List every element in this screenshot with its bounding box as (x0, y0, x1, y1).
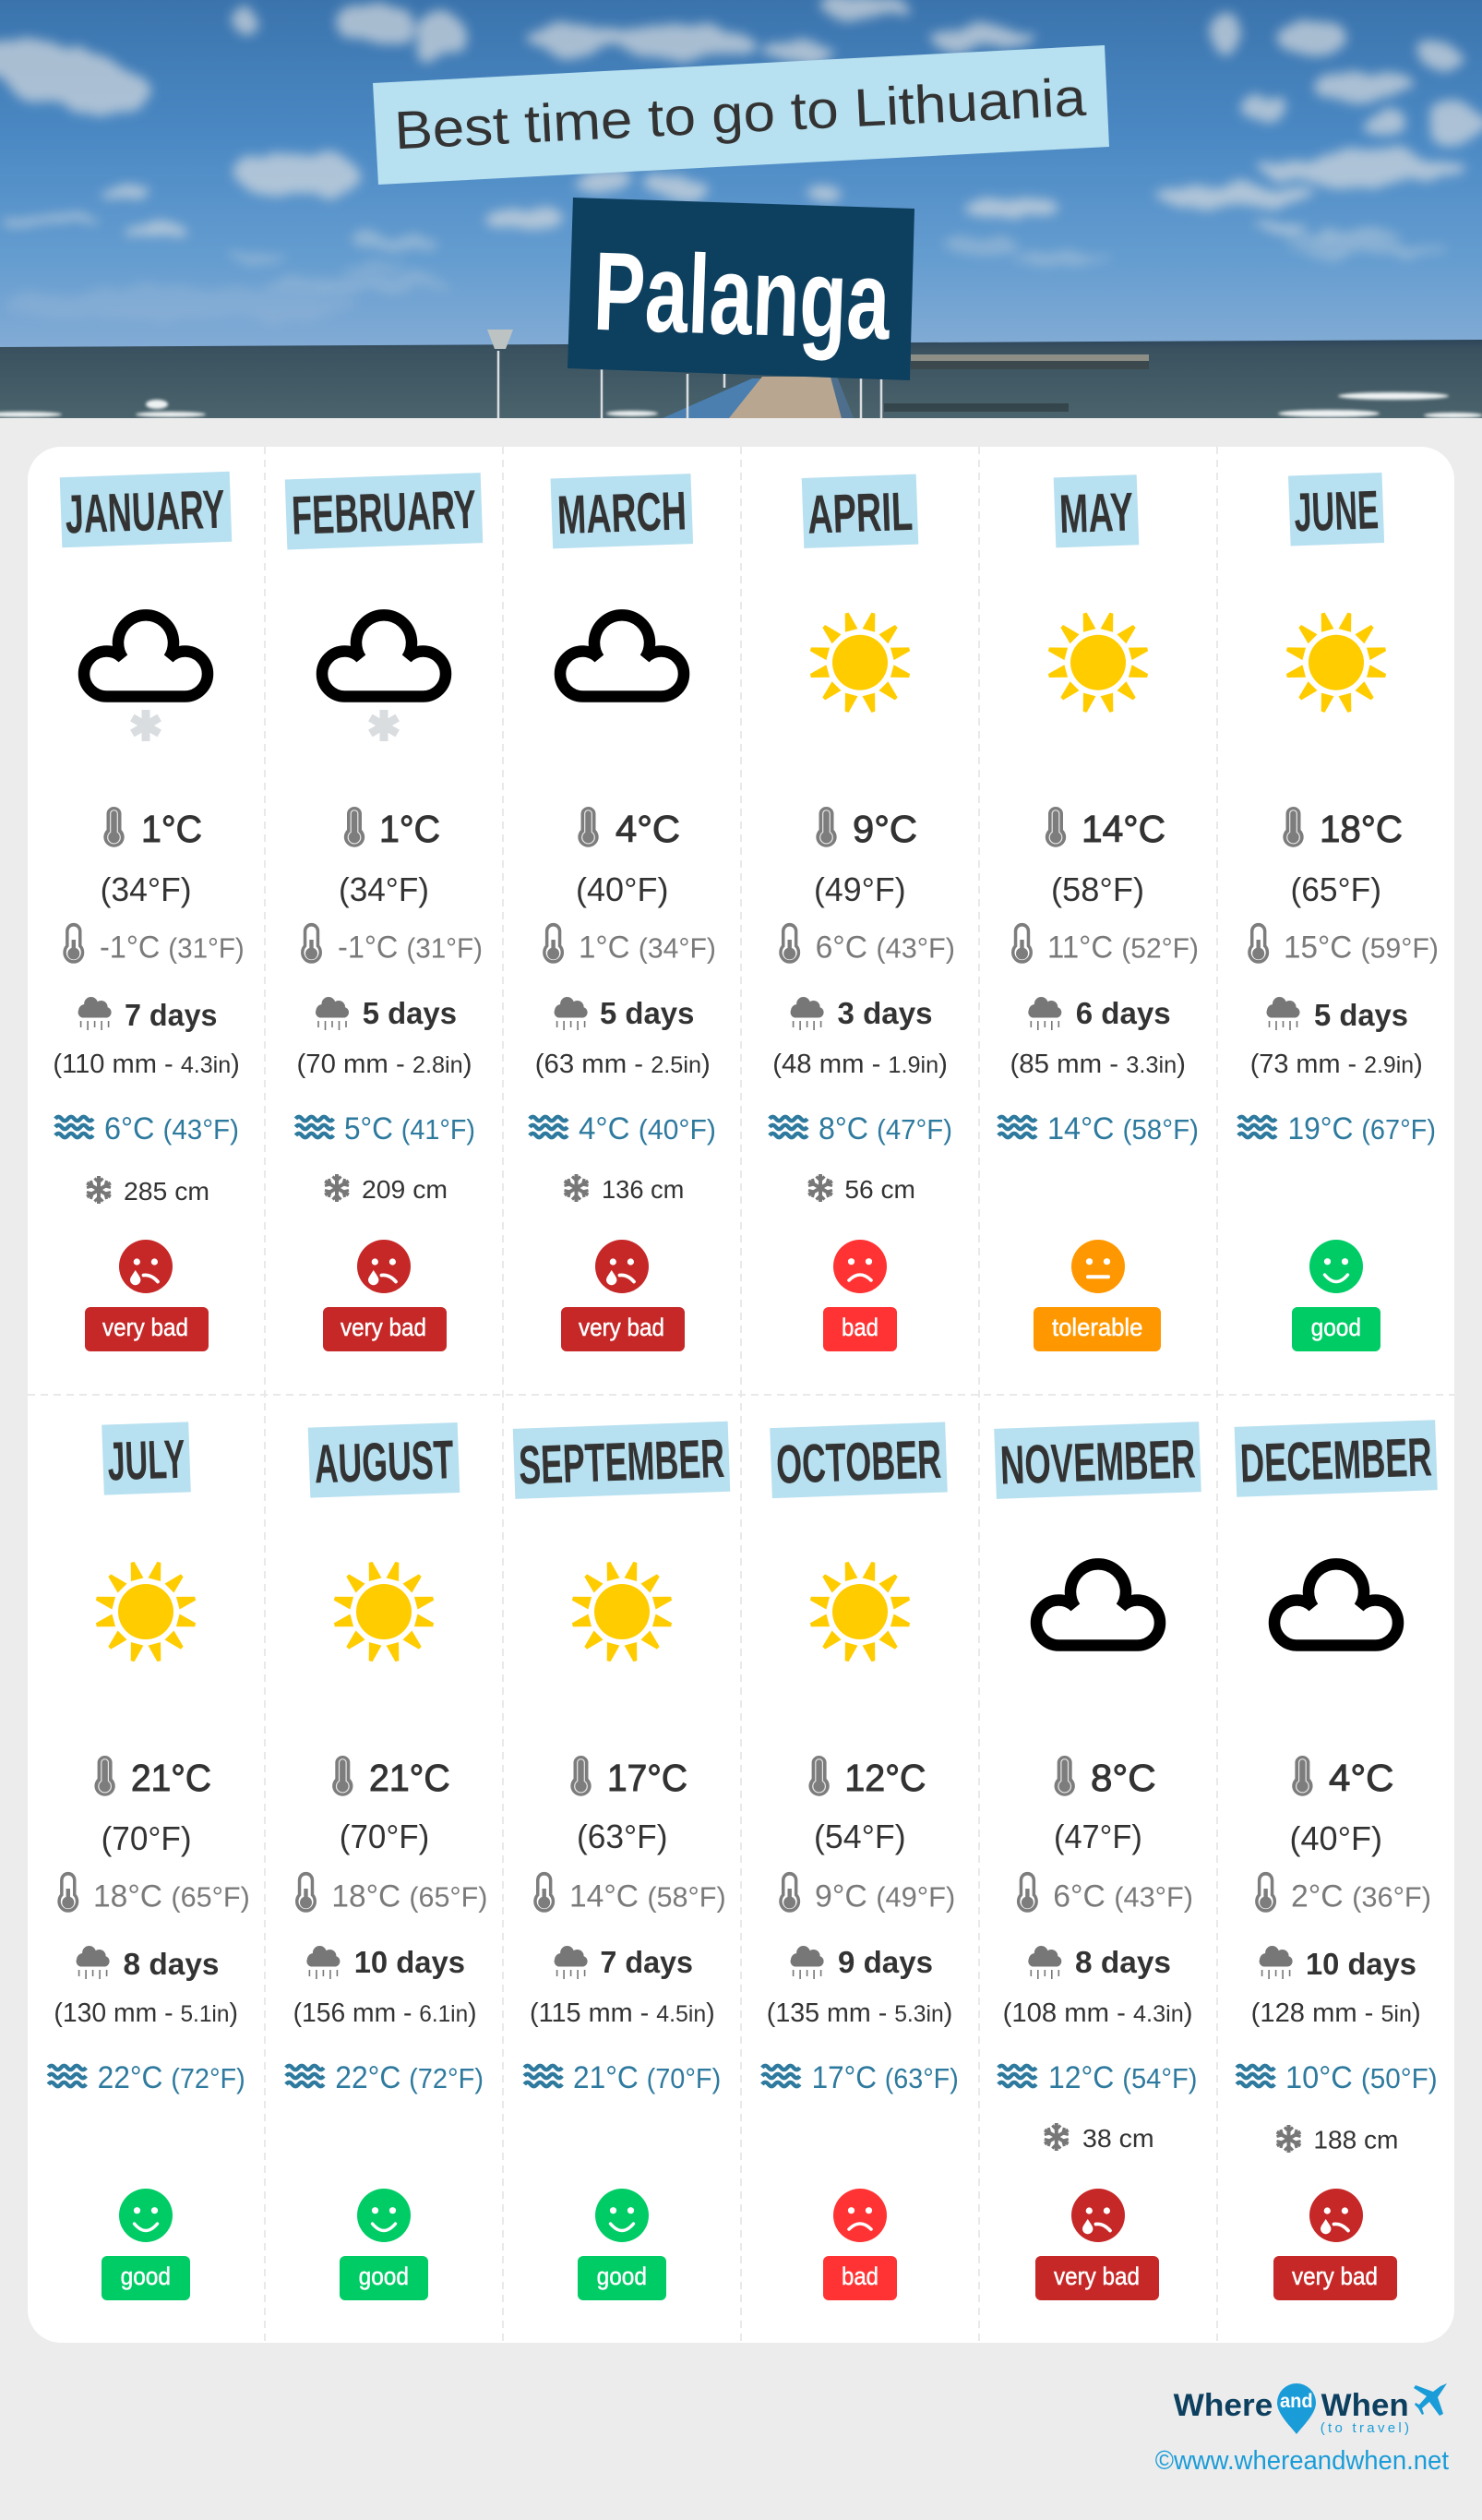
rating badge: good (121, 2262, 171, 2290)
rainy days: 5 days (363, 996, 457, 1030)
month heading: OCTOBER (775, 1429, 942, 1495)
rating face (1071, 1240, 1125, 1293)
logo: Where and When: and (1280, 2391, 1313, 2412)
icon: thermometer low (1257, 1874, 1274, 1911)
panel: July (48, 1422, 250, 2300)
average low: 15°C (59°F) (1284, 930, 1439, 966)
average low: 11°C (52°F) (1047, 930, 1199, 966)
rainy days: 9 days (838, 1945, 933, 1979)
average high celsius: 4°C (1329, 1757, 1393, 1799)
average high fahrenheit: (40°F) (576, 870, 668, 908)
average low: -1°C (31°F) (338, 930, 483, 966)
icon: thermometer low (1013, 925, 1031, 962)
panel: December (1235, 1420, 1438, 2300)
average high fahrenheit: (58°F) (1051, 870, 1144, 908)
sea temperature: 6°C (43°F) (104, 1111, 239, 1146)
month heading (308, 1422, 460, 1498)
month heading: JANUARY (64, 479, 226, 546)
average low: 18°C (65°F) (93, 1879, 250, 1914)
average high celsius: 1°C (141, 808, 202, 850)
precipitation: (85 mm - 3.3in) (1010, 1050, 1186, 1079)
icon: thermometer high (816, 807, 837, 847)
icon: sea waves (295, 1117, 333, 1137)
rating face (357, 2189, 411, 2242)
month heading (513, 1422, 730, 1499)
sea temperature: 22°C (72°F) (335, 2060, 484, 2095)
icon: sun (1285, 611, 1387, 714)
snow depth: 136 cm (602, 1175, 684, 1204)
icon: thermometer high (1292, 1756, 1313, 1796)
icon: thermometer high (808, 1756, 830, 1796)
sea temperature: 10°C (50°F) (1285, 2060, 1438, 2095)
average low: 2°C (36°F) (1291, 1879, 1431, 1914)
icon: thermometer high (570, 1756, 592, 1796)
icon: thermometer high (1046, 807, 1066, 847)
precipitation: (156 mm - 6.1in) (293, 1998, 477, 2028)
month heading (1288, 473, 1384, 546)
average high fahrenheit: (70°F) (340, 1818, 429, 1855)
rating badge (102, 2256, 190, 2300)
icon: snowflake (565, 1174, 589, 1202)
rating badge (340, 2256, 428, 2300)
rating face (1071, 2189, 1125, 2242)
icon: thermometer high (103, 807, 125, 847)
rating face (833, 2189, 887, 2242)
icon: thermometer high (332, 1756, 353, 1796)
rating badge: very bad (341, 1314, 426, 1341)
average low: 6°C (43°F) (1053, 1879, 1193, 1914)
rating face (595, 2189, 649, 2242)
icon: cloud (560, 615, 684, 696)
average high celsius: 21°C (369, 1757, 450, 1799)
rating badge (1035, 2256, 1159, 2300)
rating face (1309, 2189, 1363, 2242)
average high celsius: 1°C (379, 808, 440, 850)
icon: sea waves (55, 1117, 93, 1137)
icon: rain cloud (1028, 1946, 1061, 1979)
month heading (1054, 474, 1139, 547)
month heading: JUNE (1293, 479, 1380, 543)
rating badge (823, 2256, 897, 2300)
icon: rain cloud (78, 997, 112, 1030)
icon: sun (1047, 611, 1149, 714)
rating badge: very bad (579, 1314, 664, 1341)
rainy days: 7 days (125, 998, 218, 1032)
icon: snowflake (808, 1174, 832, 1202)
month heading: JULY (106, 1429, 186, 1492)
icon: rain cloud (791, 997, 824, 1030)
snow depth: 188 cm (1313, 2126, 1398, 2154)
icon: rain cloud (1028, 997, 1061, 1030)
title banner: Best time to go to Lithuania (393, 67, 1088, 161)
icon: sea waves (530, 1117, 568, 1137)
snow depth: 56 cm (844, 1175, 915, 1204)
average high celsius: 12°C (844, 1757, 926, 1799)
snow depth: 285 cm (124, 1177, 209, 1206)
panel: October (762, 1422, 959, 2300)
rating badge: very bad (1054, 2262, 1140, 2290)
icon: thermometer high (578, 807, 599, 847)
average high celsius: 17°C (607, 1757, 687, 1799)
precipitation: (128 mm - 5in) (1251, 1998, 1421, 2028)
month heading: FEBRUARY (291, 479, 477, 546)
average low: 1°C (34°F) (579, 930, 716, 966)
average low: 6°C (43°F) (816, 930, 955, 966)
rating badge (1034, 1307, 1161, 1351)
icon: rain cloud (1260, 1946, 1293, 1979)
header photo: Palanga pier and sky (0, 0, 1482, 418)
average high fahrenheit: (34°F) (339, 870, 429, 908)
icon: rain cloud (77, 1946, 110, 1979)
sea temperature: 19°C (67°F) (1288, 1111, 1436, 1146)
rating badge: very bad (102, 1314, 188, 1341)
icon: sea waves (998, 2066, 1036, 2086)
rainy days: 7 days (600, 1945, 693, 1979)
icon: snowflake (87, 1176, 111, 1204)
rainy days: 6 days (1076, 996, 1171, 1030)
icon: sea waves (1237, 2066, 1274, 2086)
month heading: NOVEMBER (999, 1428, 1196, 1496)
rating badge: good (597, 2262, 647, 2290)
icon: sea waves (762, 2066, 800, 2086)
icon: sun (333, 1561, 435, 1662)
icon: thermometer high (1283, 807, 1304, 847)
average low: 14°C (58°F) (569, 1879, 726, 1914)
icon: rain cloud (791, 1946, 824, 1979)
icon: thermometer low (535, 1874, 553, 1911)
rainy days: 8 days (1075, 1945, 1171, 1979)
rating face (595, 1240, 649, 1293)
sea temperature: 14°C (58°F) (1047, 1111, 1199, 1146)
icon: thermometer low (59, 1874, 78, 1911)
rating face (1309, 1240, 1363, 1293)
rating badge (578, 2256, 666, 2300)
month heading: MARCH (556, 480, 687, 546)
icon: sun (809, 611, 911, 714)
rating badge: good (359, 2262, 409, 2290)
sea temperature: 17°C (63°F) (812, 2060, 959, 2095)
precipitation: (110 mm - 4.3in) (53, 1050, 240, 1079)
average high fahrenheit: (65°F) (1290, 870, 1381, 908)
icon: rain cloud (306, 1946, 340, 1979)
rainy days: 10 days (1306, 1947, 1416, 1981)
rating badge (323, 1307, 447, 1351)
snow depth: 38 cm (1082, 2124, 1154, 2153)
icon: thermometer low (544, 925, 562, 962)
icon: rain cloud (1266, 997, 1299, 1030)
month heading (994, 1422, 1201, 1499)
rating face (119, 1240, 173, 1293)
precipitation: (73 mm - 2.9in) (1250, 1050, 1423, 1079)
panel: November (994, 1422, 1201, 2300)
icon: thermometer low (65, 925, 83, 962)
sea temperature: 21°C (70°F) (573, 2060, 721, 2095)
month heading (770, 1422, 948, 1498)
average high celsius: 18°C (1320, 808, 1403, 850)
icon: sea waves (524, 2066, 562, 2086)
average high fahrenheit: (47°F) (1054, 1818, 1142, 1855)
panel: June (1238, 473, 1439, 1351)
icon: cloud with snow (322, 615, 446, 741)
panel: May (998, 474, 1199, 1351)
logo: Where and When: When (1321, 2388, 1409, 2423)
average high celsius: 9°C (853, 808, 917, 850)
rating face (357, 1240, 411, 1293)
icon: sea waves (998, 1117, 1036, 1137)
average high fahrenheit: (34°F) (101, 870, 192, 908)
icon: cloud (1274, 1564, 1398, 1645)
rainy days: 5 days (1314, 998, 1408, 1032)
rating badge: good (1311, 1314, 1361, 1341)
logo: Where and When (1174, 2383, 1447, 2436)
panel: March (530, 474, 716, 1351)
rating badge (823, 1307, 897, 1351)
rating badge: bad (842, 2262, 878, 2290)
rainy days: 5 days (600, 996, 694, 1030)
rating badge (1273, 2256, 1397, 2300)
rating badge: tolerable (1052, 1314, 1142, 1341)
month heading (802, 474, 918, 548)
panel: April (770, 474, 955, 1351)
panel: January (53, 472, 245, 1351)
icon: rain cloud (555, 1946, 588, 1979)
icon: sun (571, 1561, 673, 1662)
sea temperature: 8°C (47°F) (819, 1111, 952, 1146)
average low: -1°C (31°F) (100, 930, 245, 966)
icon: sea waves (48, 2066, 86, 2086)
precipitation: (70 mm - 2.8in) (297, 1050, 472, 1079)
icon: cloud with snow (84, 615, 208, 741)
icon: rain cloud (555, 997, 588, 1030)
rating face (833, 1240, 887, 1293)
icon: thermometer low (297, 1874, 315, 1911)
month heading: APRIL (807, 481, 914, 546)
rainy days: 3 days (838, 996, 932, 1030)
rating face (119, 2189, 173, 2242)
panel: August (286, 1422, 487, 2300)
rainy days: 8 days (124, 1947, 220, 1981)
precipitation: (48 mm - 1.9in) (772, 1050, 948, 1079)
average low: 9°C (49°F) (815, 1879, 955, 1914)
average high fahrenheit: (70°F) (102, 1819, 192, 1857)
rainy days: 10 days (354, 1945, 465, 1979)
icon: sun (95, 1561, 197, 1662)
precipitation: (115 mm - 4.5in) (530, 1998, 715, 2028)
sea temperature: 12°C (54°F) (1048, 2060, 1198, 2095)
logo: Where and When: (to travel) (1321, 2420, 1409, 2436)
rating badge (1292, 1307, 1380, 1351)
icon: snowflake (1277, 2125, 1301, 2153)
icon: sun (809, 1561, 911, 1662)
icon: thermometer low (303, 925, 320, 962)
month heading (102, 1422, 191, 1495)
icon: thermometer low (781, 925, 798, 962)
city banner: Palanga (592, 228, 893, 363)
month heading (285, 473, 483, 549)
icon: thermometer low (1019, 1874, 1036, 1911)
month heading (60, 472, 232, 547)
panel: September (513, 1422, 730, 2300)
icon: cloud (1036, 1564, 1160, 1645)
precipitation: (130 mm - 5.1in) (54, 1998, 238, 2028)
average high celsius: 21°C (131, 1757, 211, 1799)
average high celsius: 4°C (616, 808, 680, 850)
rating badge: very bad (1292, 2262, 1378, 2290)
city banner (568, 198, 914, 380)
copyright url: ©www.whereandwhen.net (1155, 2446, 1449, 2476)
average high fahrenheit: (54°F) (814, 1818, 906, 1855)
icon: thermometer low (1249, 925, 1267, 962)
month heading: AUGUST (313, 1429, 455, 1494)
title banner (373, 45, 1109, 185)
icon: thermometer high (1054, 1756, 1075, 1796)
sea temperature: 22°C (72°F) (98, 2060, 245, 2095)
average high fahrenheit: (63°F) (577, 1818, 668, 1855)
icon: thermometer high (344, 807, 365, 847)
icon: thermometer high (94, 1756, 115, 1796)
average high fahrenheit: (40°F) (1290, 1819, 1382, 1857)
precipitation: (135 mm - 5.3in) (767, 1998, 952, 2028)
panel: monthly climate table (28, 447, 1454, 2343)
icon: snowflake (325, 1174, 349, 1202)
average high celsius: 8°C (1091, 1757, 1156, 1799)
icon: sea waves (1238, 1117, 1276, 1137)
rating badge (85, 1307, 209, 1351)
icon: sea waves (770, 1117, 807, 1137)
sea temperature: 5°C (41°F) (344, 1111, 475, 1146)
icon: rain cloud (316, 997, 349, 1030)
logo: Where and When: Where (1174, 2388, 1273, 2423)
icon: snowflake (1045, 2123, 1069, 2151)
month heading: MAY (1058, 481, 1134, 545)
month heading (551, 474, 693, 548)
average high celsius: 14°C (1082, 808, 1165, 850)
sea temperature: 4°C (40°F) (579, 1111, 716, 1146)
precipitation: (108 mm - 4.3in) (1003, 1998, 1192, 2028)
month heading: SEPTEMBER (518, 1428, 725, 1496)
rating badge (561, 1307, 685, 1351)
snow depth: 209 cm (362, 1175, 448, 1204)
icon: thermometer low (781, 1874, 798, 1911)
average high fahrenheit: (49°F) (814, 870, 906, 908)
average low: 18°C (65°F) (331, 1879, 487, 1914)
rating badge: bad (842, 1314, 878, 1341)
icon: sea waves (286, 2066, 324, 2086)
panel: February (285, 473, 483, 1351)
precipitation: (63 mm - 2.5in) (535, 1050, 711, 1079)
